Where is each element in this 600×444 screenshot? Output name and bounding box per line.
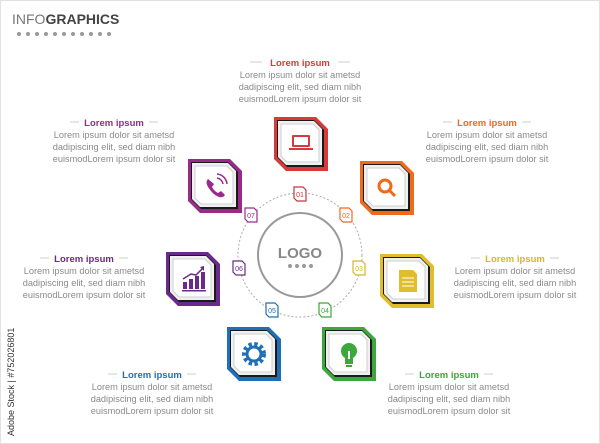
text: top right bbox=[426, 118, 549, 164]
text: bottom left bbox=[91, 370, 214, 416]
text: bottom left: Lorem ipsum dolor sit ametsd bbox=[92, 382, 212, 392]
text: middle left: euismodLorem ipsum dolor sit bbox=[23, 290, 146, 300]
text: top right: dadipiscing elit, sed diam nibh bbox=[426, 142, 548, 152]
text: top: Lorem ipsum bbox=[270, 58, 330, 69]
text: bottom left: euismodLorem ipsum dolor sit bbox=[91, 406, 214, 416]
text: top left: euismodLorem ipsum dolor sit bbox=[53, 154, 176, 164]
center logo circle: LOGO bbox=[278, 245, 322, 262]
box 6: chart bbox=[166, 252, 220, 306]
text: bottom left: Lorem ipsum bbox=[122, 370, 182, 381]
text: middle left: Lorem ipsum dolor sit ametsd bbox=[24, 266, 144, 276]
box 4: lightbulb bbox=[322, 327, 376, 381]
text: bottom right: Lorem ipsum dolor sit ametsd bbox=[389, 382, 509, 392]
text: middle left: dadipiscing elit, sed diam nibh bbox=[23, 278, 145, 288]
text: bottom left: dadipiscing elit, sed diam nibh bbox=[91, 394, 213, 404]
text: middle left bbox=[23, 254, 146, 300]
text: bottom right: euismodLorem ipsum dolor sit bbox=[388, 406, 511, 416]
text: bottom right bbox=[388, 370, 511, 416]
box 2: search bbox=[360, 161, 414, 215]
text: middle left: Lorem ipsum bbox=[54, 254, 114, 265]
badges: 05 bbox=[268, 308, 276, 315]
badges: 03 bbox=[355, 266, 363, 273]
text: top right: Lorem ipsum dolor sit ametsd bbox=[427, 130, 547, 140]
badges: 06 bbox=[235, 266, 243, 273]
text: bottom right: dadipiscing elit, sed diam nibh bbox=[388, 394, 510, 404]
text: top: euismodLorem ipsum dolor sit bbox=[239, 94, 362, 104]
box 7: phone bbox=[188, 159, 242, 213]
text: top left: dadipiscing elit, sed diam nibh bbox=[53, 142, 175, 152]
text: top left: Lorem ipsum bbox=[84, 118, 144, 129]
center logo circle bbox=[238, 193, 362, 317]
text: top right: Lorem ipsum bbox=[457, 118, 517, 129]
title: INFOGRAPHICS bbox=[12, 11, 119, 27]
box 1: laptop bbox=[274, 117, 328, 171]
badges: 01 bbox=[296, 192, 304, 199]
text: top left: Lorem ipsum dolor sit ametsd bbox=[54, 130, 174, 140]
text: top: dadipiscing elit, sed diam nibh bbox=[239, 82, 361, 92]
badges bbox=[233, 187, 365, 317]
text: middle right: Lorem ipsum bbox=[485, 254, 545, 265]
badges: 07 bbox=[247, 213, 255, 220]
title bbox=[12, 11, 119, 36]
box 5: gear bbox=[227, 327, 281, 381]
text: top bbox=[239, 58, 362, 104]
text: middle right: euismodLorem ipsum dolor sit bbox=[454, 290, 577, 300]
text: bottom right: Lorem ipsum bbox=[419, 370, 479, 381]
text: top right: euismodLorem ipsum dolor sit bbox=[426, 154, 549, 164]
text: top: Lorem ipsum dolor sit ametsd bbox=[240, 70, 360, 80]
text: top left bbox=[53, 118, 176, 164]
text: middle right: Lorem ipsum dolor sit ametsd bbox=[455, 266, 575, 276]
badges: 02 bbox=[342, 213, 350, 220]
text: middle right bbox=[454, 254, 577, 300]
watermark side text: Adobe Stock | #752026801 bbox=[6, 328, 16, 436]
box 3: document bbox=[380, 254, 434, 308]
text: middle right: dadipiscing elit, sed diam nibh bbox=[454, 278, 576, 288]
badges: 04 bbox=[321, 308, 329, 315]
